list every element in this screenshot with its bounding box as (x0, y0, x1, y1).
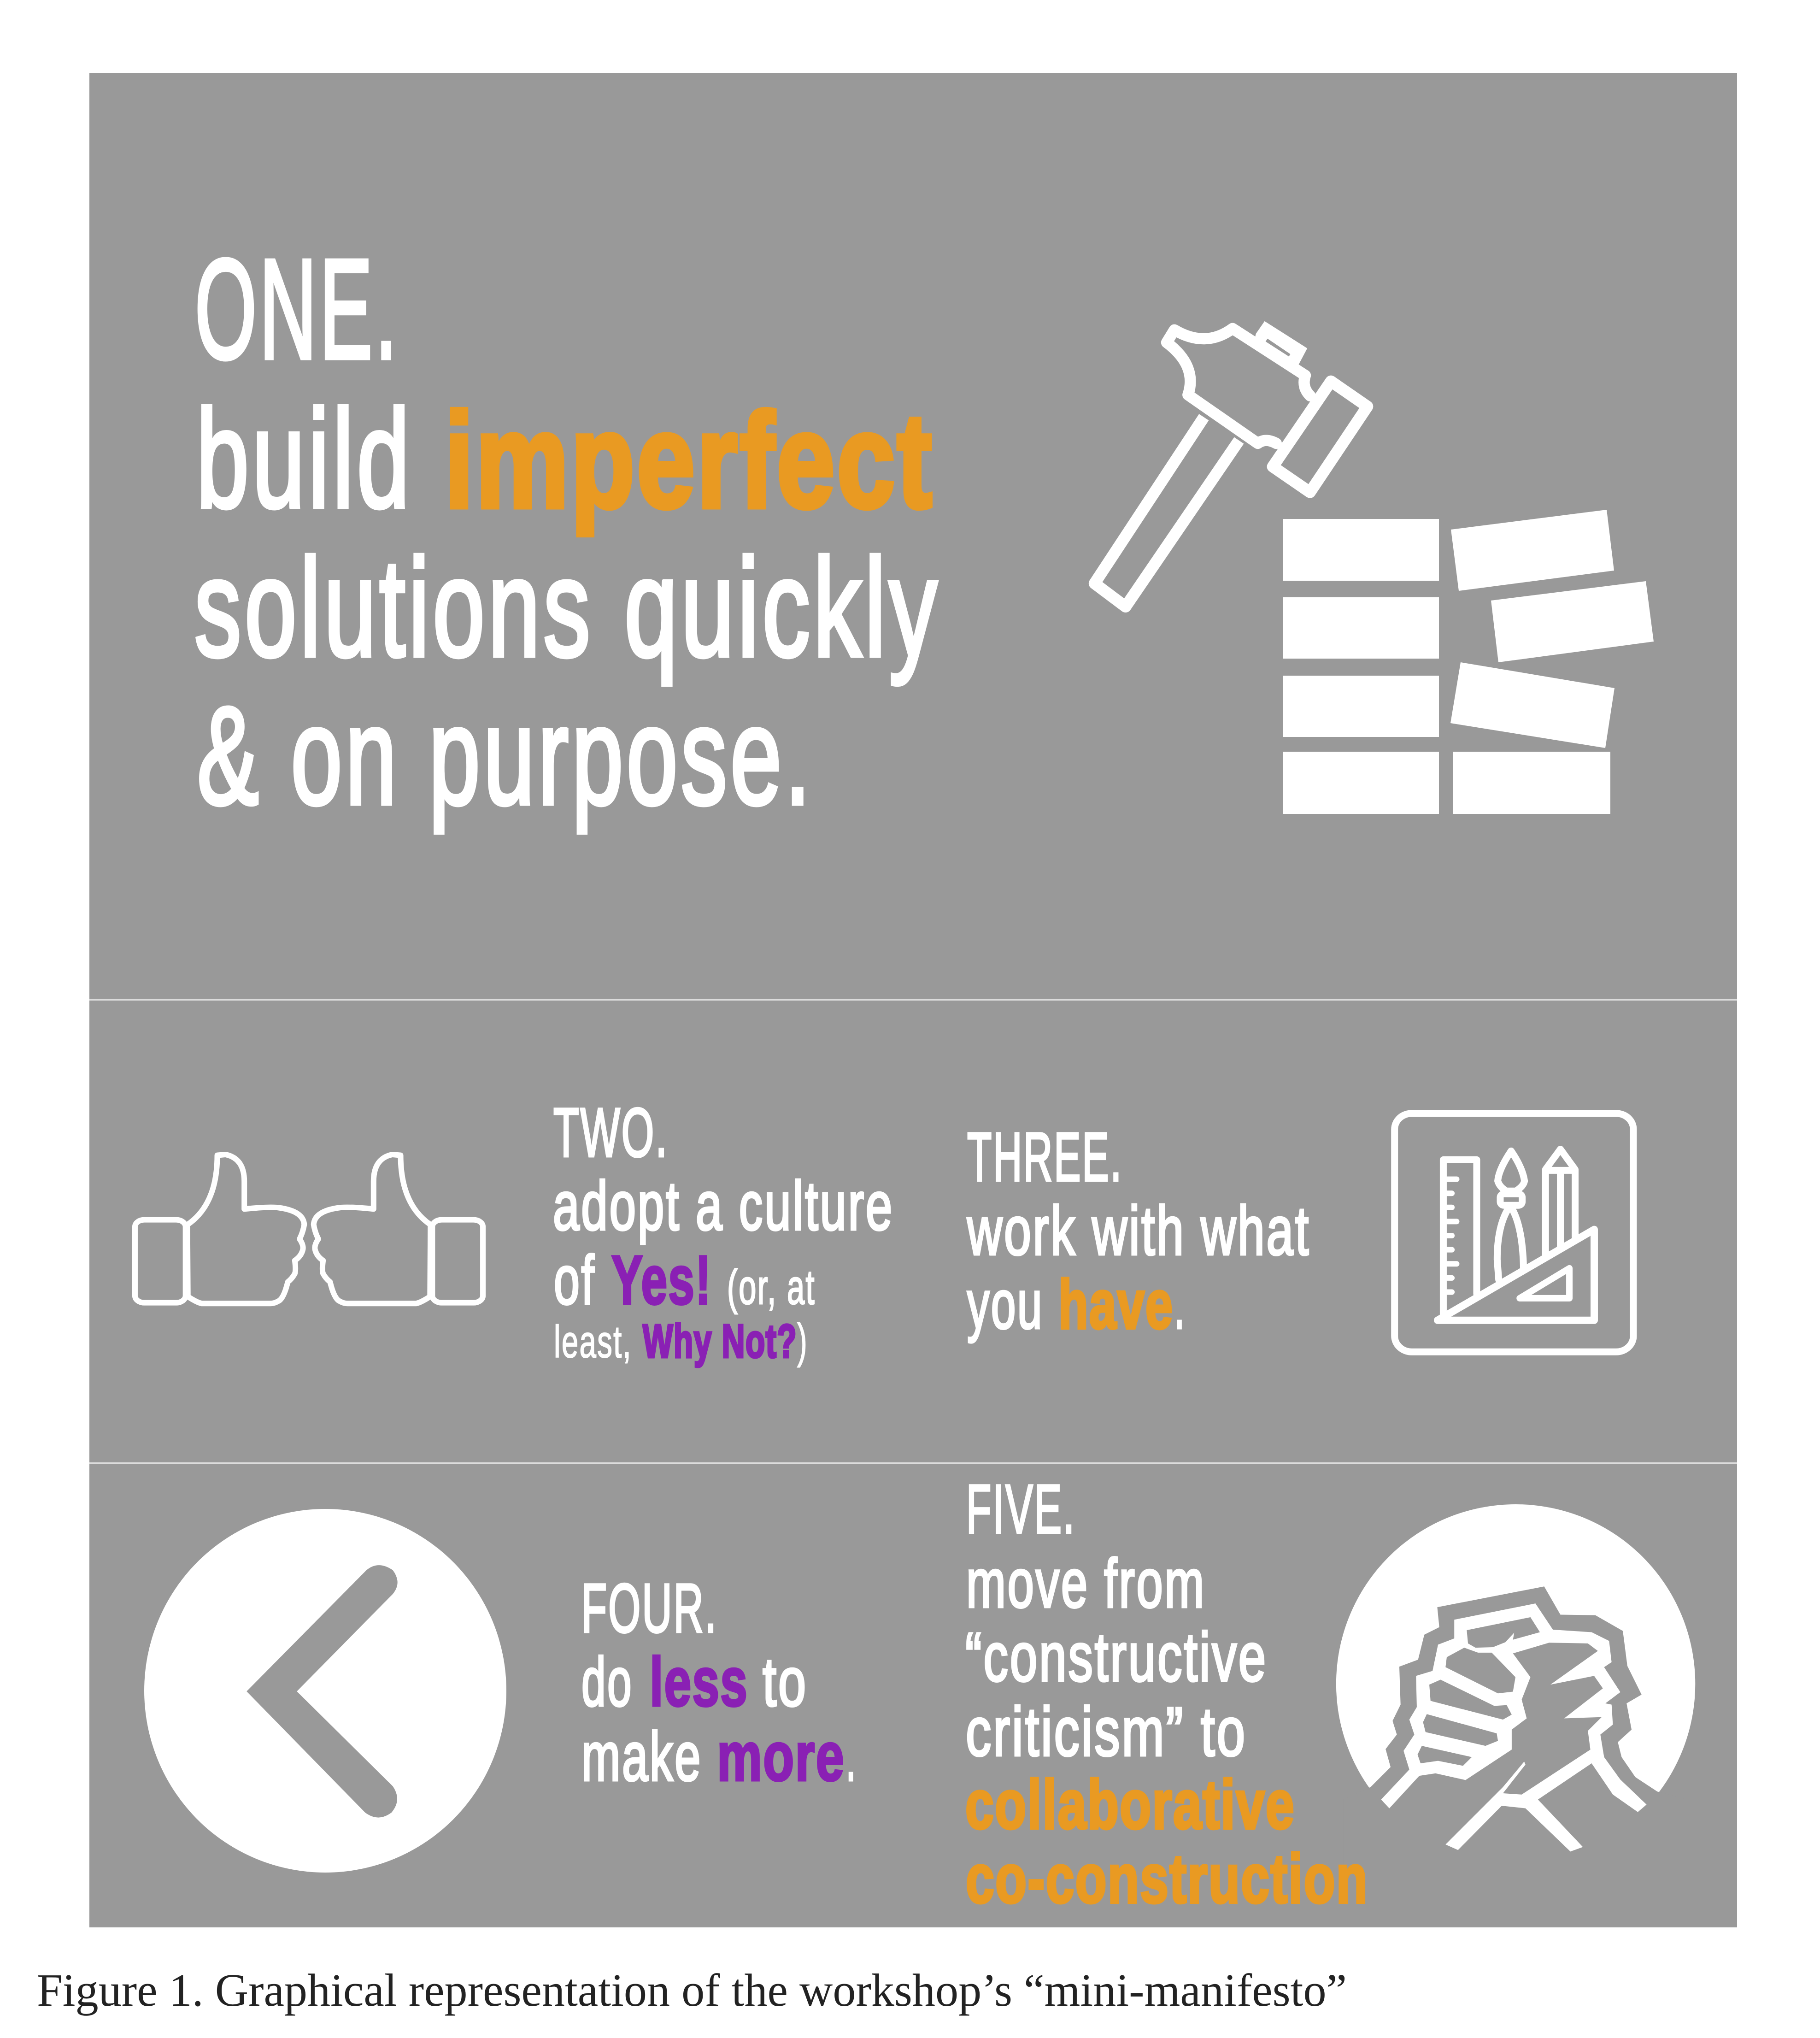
text block: TWO: (or, at (727, 1260, 816, 1314)
text block: FOUR: more (717, 1718, 845, 1795)
text block: FIVE: co-construction (966, 1840, 1368, 1917)
icon: drawing tools in rounded frame (1395, 1113, 1633, 1352)
text block: FOUR (581, 1569, 857, 1795)
text block: TWO: ) (797, 1314, 808, 1368)
text block: FOUR: FOUR. (581, 1569, 718, 1647)
icon: clasped hands in circle (1336, 1504, 1695, 1879)
text block: FOUR: make (581, 1718, 702, 1795)
text block: ONE: & on purpose. (197, 678, 814, 834)
icon: two thumbs up (135, 1154, 483, 1303)
text block: TWO: Yes! (611, 1241, 712, 1319)
text block: TWO (553, 1094, 894, 1368)
text block: FOUR: to (763, 1643, 808, 1720)
text block: TWO: of (554, 1241, 596, 1319)
text block: FIVE: move from (966, 1544, 1206, 1622)
text block: FIVE (965, 1470, 1368, 1917)
text block: THREE (967, 1118, 1310, 1343)
text block: FIVE: criticism” to (966, 1693, 1247, 1770)
text block: THREE: work with what (967, 1192, 1310, 1269)
text block: FOUR: less (650, 1643, 748, 1720)
text block: FIVE: FIVE. (966, 1470, 1076, 1548)
icon: brick wall (1283, 510, 1654, 814)
text block: ONE: quickly (624, 530, 940, 686)
text block: ONE: solutions (194, 530, 593, 685)
text block: ONE (194, 230, 940, 834)
icon: hammer (1094, 321, 1368, 607)
text block: TWO: TWO. (553, 1094, 669, 1171)
text block: ONE: imperfect (445, 385, 934, 536)
caption: Figure 1. Graphical representation of the workshop’s “mini-manifesto” (37, 1964, 1347, 2016)
text block: TWO: Why Not? (643, 1315, 797, 1367)
text block: ONE: build (196, 381, 413, 536)
text block: FIVE: “constructive (965, 1618, 1268, 1696)
text block: TWO: adopt a culture (553, 1167, 894, 1244)
icon: chevron in circle (144, 1509, 506, 1873)
text block: THREE: THREE. (967, 1118, 1123, 1196)
text block: ONE: ONE. (195, 230, 400, 389)
text block: THREE: you (967, 1266, 1044, 1343)
text block: FOUR: do (581, 1643, 633, 1720)
text block: FIVE: collaborative (965, 1766, 1295, 1843)
text block: TWO: least, (554, 1316, 632, 1367)
text block: FOUR: . (846, 1718, 857, 1795)
text block: THREE: . (1174, 1266, 1186, 1343)
text block: THREE: have (1058, 1266, 1174, 1343)
